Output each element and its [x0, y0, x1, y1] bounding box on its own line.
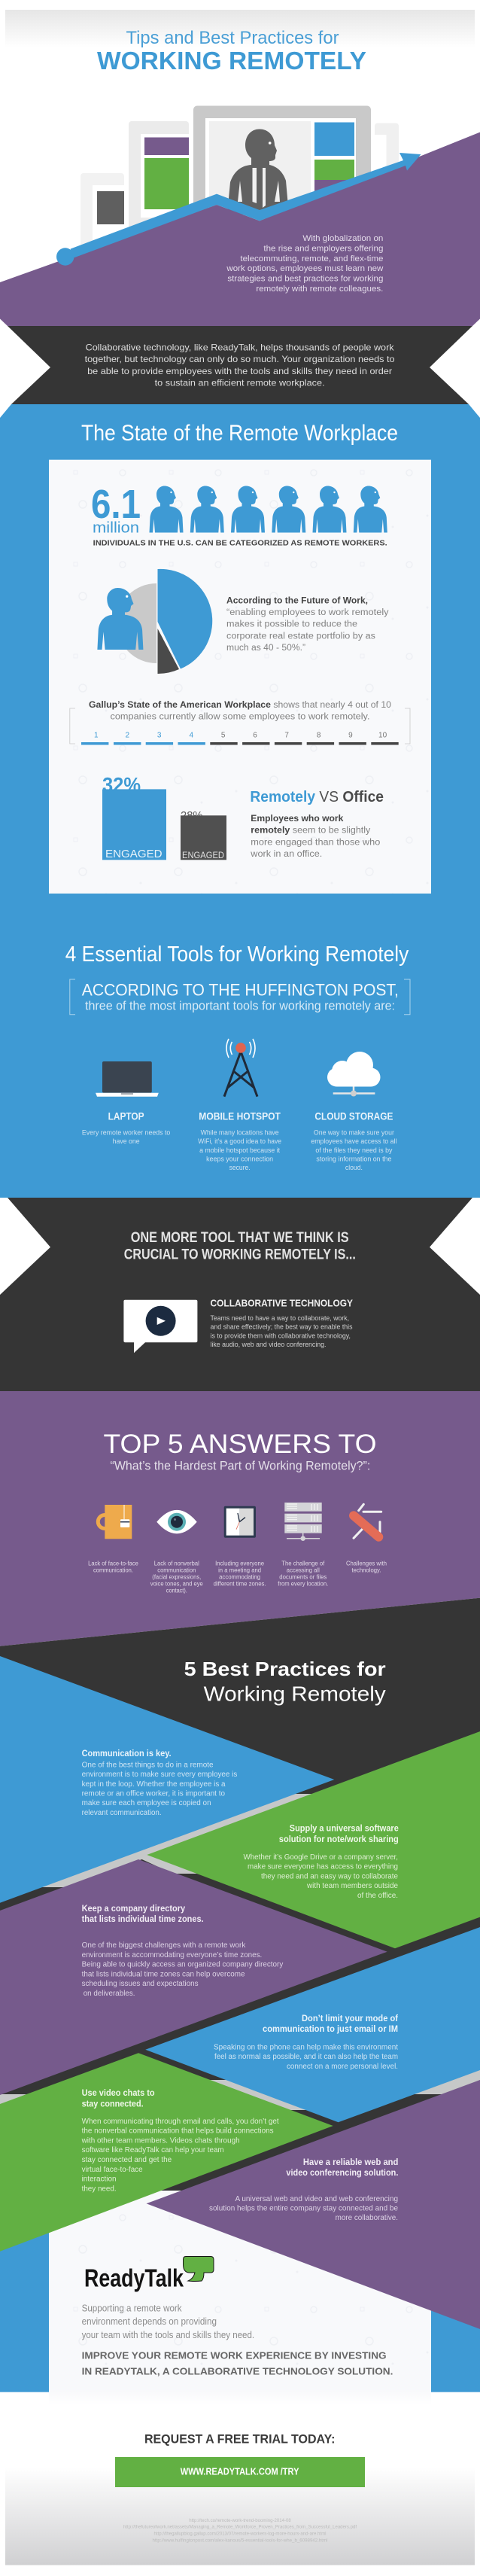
- practice 4 text: Don’t limit your mode of: [302, 2013, 399, 2023]
- caption 2: voice tones, and eye: [150, 1581, 203, 1587]
- icon: mug: [98, 1505, 132, 1539]
- tool: mobile hotspot: WiFi, it’s a good idea to have: [198, 1137, 281, 1145]
- huffington post callout: ACCORDING TO THE HUFFINGTON POST,: [82, 980, 399, 999]
- tool: cloud storage: cloud.: [345, 1164, 363, 1171]
- tool: cloud storage: [311, 1111, 396, 1171]
- practice 4 text: feel as normal as possible, and it can also help the team: [214, 2053, 398, 2061]
- people icons: [149, 486, 387, 533]
- answer captions: [88, 1560, 387, 1594]
- ten-company scale: 6: [253, 732, 257, 739]
- collaborative technology text: COLLABORATIVE TECHNOLOGY: [211, 1299, 354, 1309]
- tool: cloud storage: storing information on the: [316, 1155, 391, 1162]
- sources: http://tech.co/remote-work-trend-booming-2014-08: [189, 2519, 291, 2523]
- practice 1 text: environment is to make sure every employee is: [82, 1771, 237, 1779]
- intro text: work options, employees must learn new: [226, 264, 383, 273]
- caption 2: communication: [157, 1567, 196, 1573]
- practice 3 text: that lists individual time zones.: [82, 1914, 204, 1924]
- heading: top 5 answers: TOP 5 ANSWERS TO: [104, 1430, 377, 1459]
- tool: laptop: LAPTOP: [108, 1111, 144, 1122]
- icon: clock: [224, 1506, 256, 1538]
- stat caption: INDIVIDUALS IN THE U.S. CAN BE CATEGORIZED AS REMOTE WORKERS.: [93, 538, 387, 547]
- closing call to action: IN READYTALK, A COLLABORATIVE TECHNOLOGY SOLUTION.: [82, 2366, 393, 2377]
- huffington post callout: three of the most important tools for working remotely are:: [85, 1000, 395, 1013]
- icon: mobile hotspot tower: [224, 1039, 257, 1097]
- right device: [375, 123, 399, 184]
- caption 4: documents or files: [279, 1573, 327, 1581]
- dark ribbon: [8, 326, 472, 404]
- closing call to action: IMPROVE YOUR REMOTE WORK EXPERIENCE BY INVESTING: [82, 2349, 387, 2361]
- small device: [81, 173, 124, 294]
- title: Tips and Best Practices for: [126, 28, 339, 48]
- practice 5 text: they need.: [82, 2185, 117, 2194]
- ten-company scale: 8: [317, 732, 321, 739]
- practice 3 text: scheduling issues and expectations: [82, 1980, 199, 1988]
- shape: green practice 2: [147, 1731, 480, 1948]
- practice 5 text: interaction: [82, 2176, 117, 2183]
- practice 1 text: kept in the loop. Whether the employee is a: [82, 1780, 226, 1789]
- intro text: strategies and best practices for working: [227, 274, 383, 283]
- future of work text: much as 40 - 50%.”: [226, 644, 305, 653]
- practice 1 text: Communication is key.: [82, 1748, 172, 1758]
- dark section: one more tool: [0, 1198, 480, 1391]
- collaborative technology text: [211, 1299, 354, 1348]
- tool: mobile hotspot: MOBILE HOTSPOT: [199, 1111, 281, 1122]
- intro text: telecommuting, remote, and flex-time: [240, 254, 383, 263]
- ten-company scale: 5: [221, 732, 226, 739]
- caption 2: [150, 1560, 203, 1594]
- purple hero band: [0, 132, 480, 326]
- practice 5 text: When communicating through email and calls, you don’t get: [82, 2118, 279, 2126]
- tool: cloud storage: employees have access to all: [311, 1137, 396, 1145]
- practice 1 text: make sure each employee is copied on: [82, 1799, 211, 1807]
- purple section: top 5 answers: [0, 1391, 480, 1646]
- ten-company scale: 4: [190, 732, 194, 739]
- growth arrow: [56, 153, 421, 266]
- intro text: the rise and employers offering: [263, 244, 383, 253]
- heading: one more tool: [124, 1230, 356, 1263]
- closing text: [82, 2302, 254, 2340]
- practice 1 text: [82, 1748, 237, 1817]
- large monitor: [193, 105, 371, 241]
- practice 1 text: relevant communication.: [82, 1809, 162, 1817]
- future of work text: corporate real estate portfolio by as: [226, 632, 375, 641]
- tool: mobile hotspot: secure.: [229, 1164, 251, 1171]
- gallup text: Gallup’s State of the American Workplace shows that nearly 4 out of 10: [89, 701, 391, 710]
- tool: laptop: have one: [113, 1137, 140, 1145]
- tool: laptop: [82, 1111, 170, 1145]
- practice 2 text: they need and an easy way to collaborate: [261, 1873, 398, 1880]
- tool: mobile hotspot: While many locations have: [201, 1129, 279, 1137]
- future of work text: [226, 597, 389, 653]
- heading: top 5 answers: “What’s the Hardest Part of Working Remotely?”:: [110, 1459, 370, 1472]
- practice 3 text: on deliverables.: [84, 1990, 135, 1998]
- stat: 6.1 million: 6.1: [91, 482, 141, 527]
- closing panel background: [0, 2183, 480, 2404]
- practice 6 text: solution helps the entire company stay connected and be: [209, 2204, 398, 2213]
- intro text: remotely with remote colleagues.: [256, 285, 383, 294]
- huffington post callout: [70, 979, 410, 1015]
- gallup text: [89, 701, 391, 722]
- practice 5 text: with other team members. Videos chats through: [81, 2136, 240, 2145]
- bar chart: engagement: 28%: [181, 809, 203, 822]
- tool: cloud storage: One way to make sure your: [314, 1129, 394, 1137]
- heading: 5 best practices: [184, 1658, 386, 1705]
- shape: purple practice 3: [0, 1859, 387, 2095]
- sources: [123, 2519, 357, 2543]
- button: website: [115, 2457, 365, 2487]
- ten-company scale: [81, 732, 399, 745]
- gallup text: companies currently allow some employees to work remotely.: [110, 713, 370, 722]
- practice 5 text: stay connected and get the: [82, 2156, 172, 2164]
- bar chart: engagement: [102, 773, 226, 860]
- heading: one more tool: CRUCIAL TO WORKING REMOTELY IS...: [124, 1247, 356, 1263]
- future of work text: “enabling employees to work remotely: [226, 608, 389, 617]
- practice 5 text: Use video chats to: [82, 2087, 155, 2098]
- caption 5: [346, 1560, 387, 1573]
- intro text: [226, 234, 383, 294]
- white gap below green: [128, 2191, 181, 2203]
- pie chart with person: [97, 569, 212, 674]
- practice 2 text: with team members outside: [306, 1882, 398, 1890]
- bar chart: engagement: ENGAGED: [105, 848, 163, 860]
- heading: 5 best practices: Working Remotely: [204, 1682, 386, 1705]
- practice 5 text: the nonverbal communication that helps build connections: [82, 2127, 274, 2135]
- practice 5 text: virtual face-to-face: [82, 2166, 143, 2174]
- header gradient: [5, 10, 475, 47]
- practice 3 text: Keep a company directory: [82, 1903, 185, 1914]
- bar chart: engagement: 32%: [102, 773, 141, 796]
- tool: mobile hotspot: keeps your connection: [206, 1155, 273, 1162]
- caption 5: technology.: [352, 1567, 381, 1573]
- request heading: REQUEST A FREE TRIAL TODAY:: [144, 2431, 335, 2446]
- engagement text: remotely seem to be slightly: [251, 827, 371, 836]
- sources: http://thegallupblog.gallup.com/2013/07/remote-workers-log-more-hours-and-are.html: [153, 2532, 327, 2537]
- button: website: WWW.READYTALK.COM /TRY: [181, 2467, 299, 2477]
- icon: video chat bubble: [123, 1300, 197, 1353]
- hero illustration: device screens: [81, 105, 399, 294]
- closing text: your team with the tools and skills they need.: [82, 2329, 254, 2340]
- caption 1: communication.: [93, 1567, 133, 1573]
- ten-company scale: 7: [284, 732, 289, 739]
- practice 2 text: solution for note/work sharing: [279, 1834, 399, 1844]
- title: WORKING REMOTELY: [97, 47, 366, 75]
- practice 2 text: Whether it’s Google Drive or a company server,: [244, 1853, 398, 1862]
- collaborative technology text: Teams need to have a way to collaborate, work,: [211, 1314, 349, 1322]
- engagement text: Employees who work: [251, 815, 344, 824]
- practice 3 text: environment is accommodating everyone’s time zones.: [82, 1951, 262, 1959]
- caption 2: contact).: [166, 1587, 187, 1594]
- heading: 5 best practices: 5 Best Practices for: [184, 1658, 386, 1680]
- ten-company scale: 2: [126, 732, 130, 739]
- engagement text: work in an office.: [250, 850, 322, 859]
- heading: one more tool: ONE MORE TOOL THAT WE THINK IS: [131, 1230, 349, 1246]
- caption 4: accessing all: [287, 1567, 320, 1573]
- ribbon text: together, but technology can only do so much. Your organization needs to: [85, 354, 395, 364]
- ribbon text: Collaborative technology, like ReadyTalk, helps thousands of people work: [86, 342, 395, 352]
- caption 2: Lack of nonverbal: [154, 1560, 199, 1567]
- practice 3 text: [82, 1903, 283, 1998]
- practice 6 text: A universal web and video and web conferencing: [235, 2195, 398, 2203]
- stat: 6.1 million: million: [93, 519, 139, 536]
- ten-company scale: 9: [348, 732, 353, 739]
- caption 4: The challenge of: [281, 1560, 325, 1567]
- icon: cloud storage: [327, 1052, 381, 1096]
- caption 5: Challenges with: [346, 1560, 387, 1567]
- intro text: With globalization on: [302, 234, 383, 243]
- ten-company scale: 10: [378, 732, 387, 739]
- engagement text: more engaged than those who: [251, 838, 380, 847]
- ten-company scale: 3: [157, 732, 162, 739]
- caption 3: Including everyone: [215, 1560, 265, 1567]
- heading: essential tools: 4 Essential Tools for Working Remotely: [65, 942, 409, 967]
- caption 3: in a meeting and: [218, 1567, 261, 1573]
- practice 4 text: Speaking on the phone can help make this environment: [214, 2043, 398, 2052]
- practice 5 text: [81, 2087, 279, 2194]
- practice 3 text: One of the biggest challenges with a remote work: [82, 1941, 246, 1950]
- dark background: best practices: [0, 1598, 480, 2191]
- caption 2: (facial expressions,: [152, 1573, 201, 1581]
- practice 3 text: Being able to quickly access an organized company directory: [82, 1960, 283, 1969]
- blue section background: [0, 404, 480, 1198]
- ribbon text: [85, 342, 395, 388]
- shape: blue practice 1: [0, 1656, 334, 1903]
- practice 6 text: [209, 2157, 398, 2222]
- practice 5 text: software like ReadyTalk can help your team: [82, 2146, 224, 2154]
- practice 2 text: Supply a universal software: [290, 1823, 399, 1834]
- shape: green practice 5: [0, 2053, 333, 2252]
- heading: top 5 answers: [104, 1430, 377, 1472]
- collaborative technology text: like audio, web and video conferencing.: [211, 1341, 327, 1348]
- collaborative technology text: and share effectively; the best way to enable this: [211, 1323, 353, 1331]
- practice 3 text: that lists individual time zones can help overcome: [82, 1971, 245, 1978]
- practice 2 text: make sure everyone has access to everything: [248, 1862, 398, 1871]
- tool: mobile hotspot: [198, 1111, 281, 1171]
- icon: eye: [156, 1510, 197, 1533]
- caption 1: [88, 1560, 138, 1573]
- panel: state of the workplace: [49, 460, 431, 894]
- tool: laptop: Every remote worker needs to: [82, 1129, 170, 1137]
- ribbon text: to sustain an efficient remote workplace.: [155, 378, 325, 388]
- icon: swiss army knife: [354, 1504, 381, 1538]
- caption 4: from every location.: [278, 1581, 328, 1587]
- practice 4 text: communication to just email or IM: [263, 2023, 398, 2034]
- practice 4 text: [214, 2013, 399, 2071]
- title: [97, 28, 366, 75]
- practice 6 text: more collaborative.: [336, 2214, 398, 2222]
- practice 5 text: stay connected.: [82, 2099, 144, 2109]
- caption 3: different time zones.: [214, 1581, 266, 1587]
- icon: server racks: [284, 1503, 322, 1541]
- practice 1 text: One of the best things to do in a remote: [82, 1761, 214, 1769]
- closing text: environment depends on providing: [82, 2316, 217, 2327]
- sources: http://www.huffingtonpost.com/alex-kanous/5-essential-tools-for-whe_b_6098942.html: [152, 2538, 328, 2543]
- shape: blue practice 4: [145, 1927, 480, 2122]
- future of work text: According to the Future of Work,: [226, 597, 368, 606]
- sources: http://thefutureofwork.net/assets/Managing_a_Remote_Workforce_Proven_Practices_from_Successful_Leaders.pdf: [123, 2526, 357, 2530]
- tool: cloud storage: CLOUD STORAGE: [314, 1111, 393, 1122]
- heading: state of the remote workplace: The State of the Remote Workplace: [81, 421, 398, 446]
- tool: mobile hotspot: a mobile hotspot because it: [199, 1146, 281, 1154]
- practice 4 text: connect on a more personal level.: [287, 2063, 398, 2071]
- engagement text: [250, 815, 380, 859]
- practice 2 text: [244, 1823, 399, 1900]
- caption 3: [214, 1560, 266, 1587]
- shape: purple practice 6: [146, 2080, 480, 2329]
- caption 4: [278, 1560, 328, 1587]
- businessman figure: [227, 129, 289, 215]
- closing call to action: [82, 2349, 393, 2377]
- footer gradient: [5, 2467, 475, 2565]
- collaborative technology text: is to provide them with collaborative technology,: [211, 1332, 351, 1339]
- closing text: Supporting a remote work: [82, 2302, 182, 2314]
- brackets: [70, 708, 410, 744]
- tool: cloud storage: of the files they need is by: [315, 1146, 393, 1154]
- bar chart: engagement: ENGAGED: [182, 851, 224, 860]
- practice 2 text: of the office.: [357, 1892, 398, 1900]
- icon: laptop: [96, 1061, 159, 1097]
- practice 6 text: Have a reliable web and: [303, 2157, 398, 2167]
- tablet device: [129, 121, 189, 257]
- readytalk logo: ReadyTalk: [84, 2264, 184, 2292]
- ribbon text: be able to provide employees with the tools and skills they need in order: [87, 366, 392, 376]
- practice 1 text: remote or an office worker, it is important to: [82, 1790, 225, 1798]
- future of work text: makes it possible to reduce the: [226, 620, 357, 629]
- caption 1: Lack of face-to-face: [88, 1560, 138, 1567]
- caption 3: accommodating: [219, 1573, 260, 1581]
- practice 6 text: video conferencing solution.: [286, 2167, 398, 2178]
- remotely vs office: Remotely VS Office: [250, 789, 384, 805]
- ten-company scale: 1: [94, 732, 99, 739]
- grey gap stripes: [0, 1794, 480, 2110]
